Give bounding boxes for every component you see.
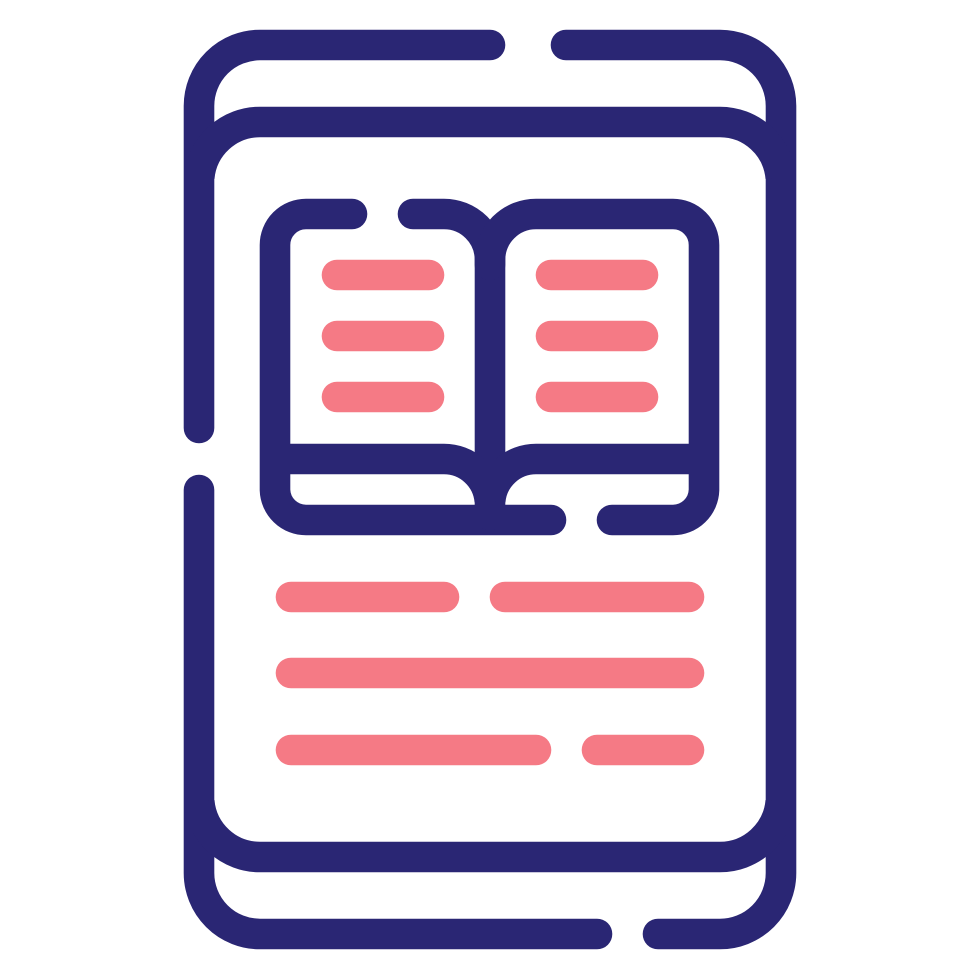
open book icon: [275, 214, 704, 520]
book text lines: [337, 275, 643, 397]
tablet outer body: [199, 45, 781, 934]
tablet screen: [199, 122, 781, 857]
page text lines: [291, 597, 689, 750]
